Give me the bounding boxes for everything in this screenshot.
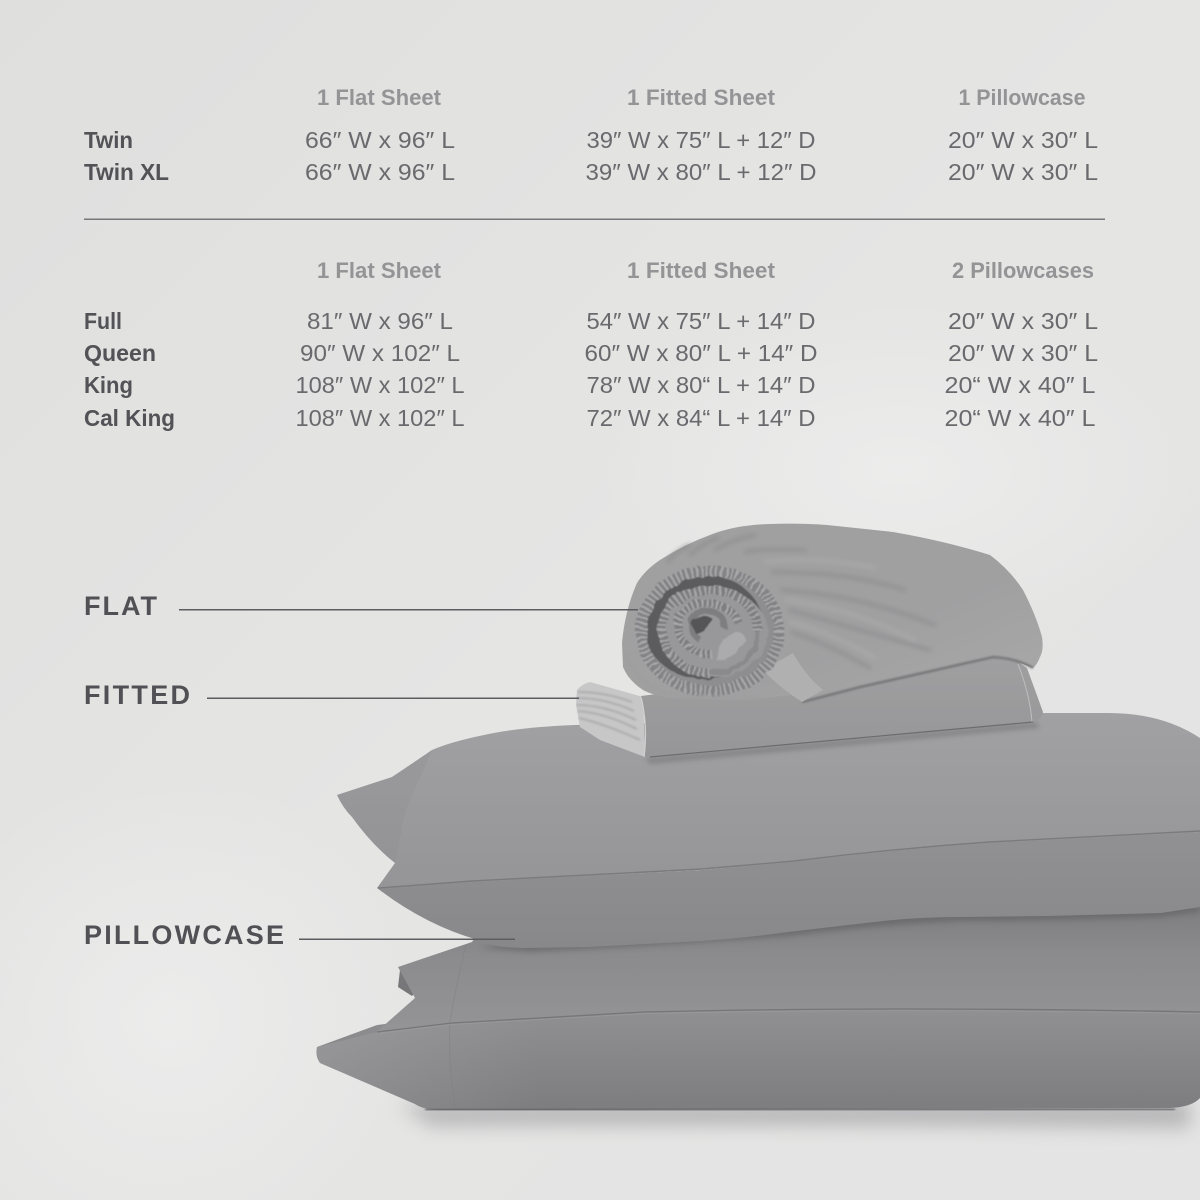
row: Queen: Queen <box>84 340 156 366</box>
row: Twin XL: 39″ W x 80″ L + 12″ D <box>586 159 816 185</box>
floor shadow <box>400 1100 1190 1128</box>
row: Cal King: 72″ W x 84“ L + 14″ D <box>586 405 816 431</box>
row: Twin XL: 20″ W x 30″ L <box>948 159 1098 185</box>
column headings <box>317 85 1086 110</box>
row: King: 108″ W x 102″ L <box>296 372 465 398</box>
row: Full <box>84 308 1098 334</box>
callout: pillowcase: PILLOWCASE <box>84 920 284 950</box>
size table: larger sizes <box>84 258 1098 431</box>
callout: fitted: FITTED <box>84 680 190 710</box>
row: Twin XL <box>84 159 1098 185</box>
row: Twin <box>84 127 1098 153</box>
row: Twin: Twin <box>84 127 133 153</box>
row: Full: 20″ W x 30″ L <box>948 308 1098 334</box>
column headings: 2 Pillowcases <box>952 258 1094 283</box>
row: Twin: 66″ W x 96″ L <box>305 127 455 153</box>
rolled fitted sheet <box>622 524 1043 702</box>
ruffled lower hem <box>626 655 760 698</box>
column headings: 1 Fitted Sheet <box>627 258 776 283</box>
light drape flap <box>763 653 823 702</box>
row: Full: 81″ W x 96″ L <box>307 308 453 334</box>
row: Full: 54″ W x 75″ L + 14″ D <box>586 308 816 334</box>
row: Twin: 20″ W x 30″ L <box>948 127 1098 153</box>
row: Queen: 60″ W x 80″ L + 14″ D <box>584 340 818 366</box>
bottom pillow <box>316 900 1200 1110</box>
shadow under top pillow <box>480 905 1200 952</box>
row: Twin XL: Twin XL <box>84 159 169 185</box>
column headings: 1 Flat Sheet <box>317 85 442 110</box>
roll end <box>637 568 783 694</box>
row: Queen <box>84 340 1098 366</box>
row: Cal King: 20“ W x 40″ L <box>944 405 1096 431</box>
row: Twin: 39″ W x 75″ L + 12″ D <box>586 127 816 153</box>
top pillow <box>337 713 1200 948</box>
size table: twin sizes <box>84 85 1098 185</box>
callout: flat: FLAT <box>84 591 158 621</box>
pillow and sheet stack photo illustration <box>316 524 1200 1128</box>
column headings: 1 Pillowcase <box>958 85 1086 110</box>
gathered folds <box>668 535 935 668</box>
row: Queen: 20″ W x 30″ L <box>948 340 1098 366</box>
row: Cal King: Cal King <box>84 405 175 431</box>
column headings <box>317 258 1094 283</box>
row: Full: Full <box>84 308 122 334</box>
row: King: King <box>84 372 133 398</box>
row: Cal King: 108″ W x 102″ L <box>296 405 465 431</box>
column headings: 1 Flat Sheet <box>317 258 442 283</box>
row: Cal King <box>84 405 1096 431</box>
row: King <box>84 372 1096 398</box>
folded flat sheet <box>576 650 1043 764</box>
table divider <box>84 218 1105 220</box>
row: Twin XL: 66″ W x 96″ L <box>305 159 455 185</box>
row: King: 78″ W x 80“ L + 14″ D <box>586 372 816 398</box>
row: Queen: 90″ W x 102″ L <box>300 340 460 366</box>
row: King: 20“ W x 40″ L <box>944 372 1096 398</box>
column headings: 1 Fitted Sheet <box>627 85 776 110</box>
